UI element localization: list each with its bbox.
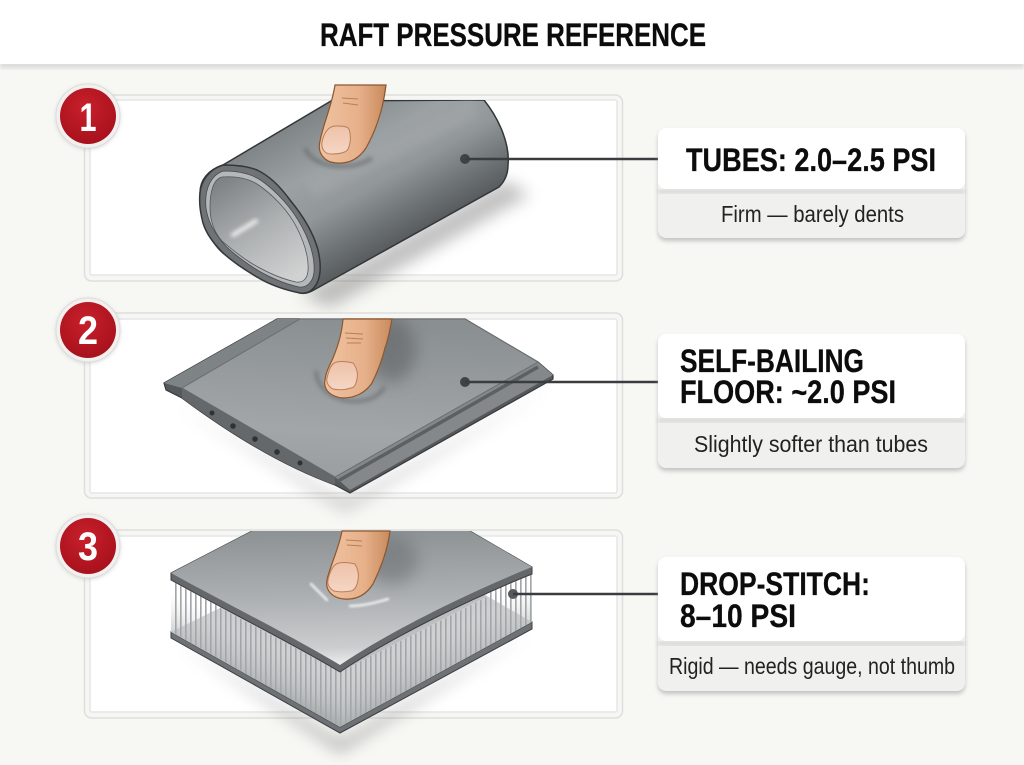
badge 2: 2: [78, 309, 98, 353]
badge 1: 1: [80, 96, 96, 140]
icon: finger pressing tube: [319, 85, 386, 163]
panel 2: floor: [84, 313, 658, 510]
card 2 note: Slightly softer than tubes: [694, 431, 928, 457]
icon: inflated tube: [200, 100, 508, 293]
panel 1: tubes: [84, 85, 658, 308]
connector line 3: [508, 589, 658, 599]
icon: drop-stitch panel: [171, 531, 532, 733]
card 2 heading: SELF-BAILING: [680, 343, 864, 379]
card 1 heading: TUBES: 2.0–2.5 PSI: [686, 142, 936, 178]
icon: self-bailing floor: [164, 318, 553, 493]
title: RAFT PRESSURE REFERENCE: [320, 17, 706, 53]
card 3 heading: DROP-STITCH:: [680, 566, 870, 602]
badge 3: 3: [78, 525, 98, 569]
icon: finger pressing drop-stitch: [327, 531, 390, 599]
tube shadow: [300, 180, 530, 308]
card 3 note: Rigid — needs gauge, not thumb: [669, 653, 955, 679]
card 3 heading: 8–10 PSI: [680, 598, 796, 634]
connector line 1: [460, 154, 658, 164]
floor drain holes: [210, 410, 302, 466]
drop-stitch shadow: [178, 632, 530, 752]
panel 3: drop-stitch: [84, 530, 658, 752]
tube open end: [200, 165, 320, 293]
badge 1: [56, 84, 120, 149]
callout card 3: [658, 557, 965, 694]
card 1 note: Firm — barely dents: [721, 201, 904, 227]
icon: finger pressing floor: [325, 319, 392, 398]
connector line 2: [460, 377, 658, 387]
callout card 2: [658, 334, 965, 471]
floor shadow: [178, 388, 550, 510]
badge 2: [56, 298, 120, 363]
card 2 heading: FLOOR: ~2.0 PSI: [680, 374, 896, 410]
header bar: [0, 0, 1024, 68]
badge 3: [56, 514, 120, 579]
callout card 1: [658, 128, 965, 241]
back threads: [172, 570, 532, 632]
